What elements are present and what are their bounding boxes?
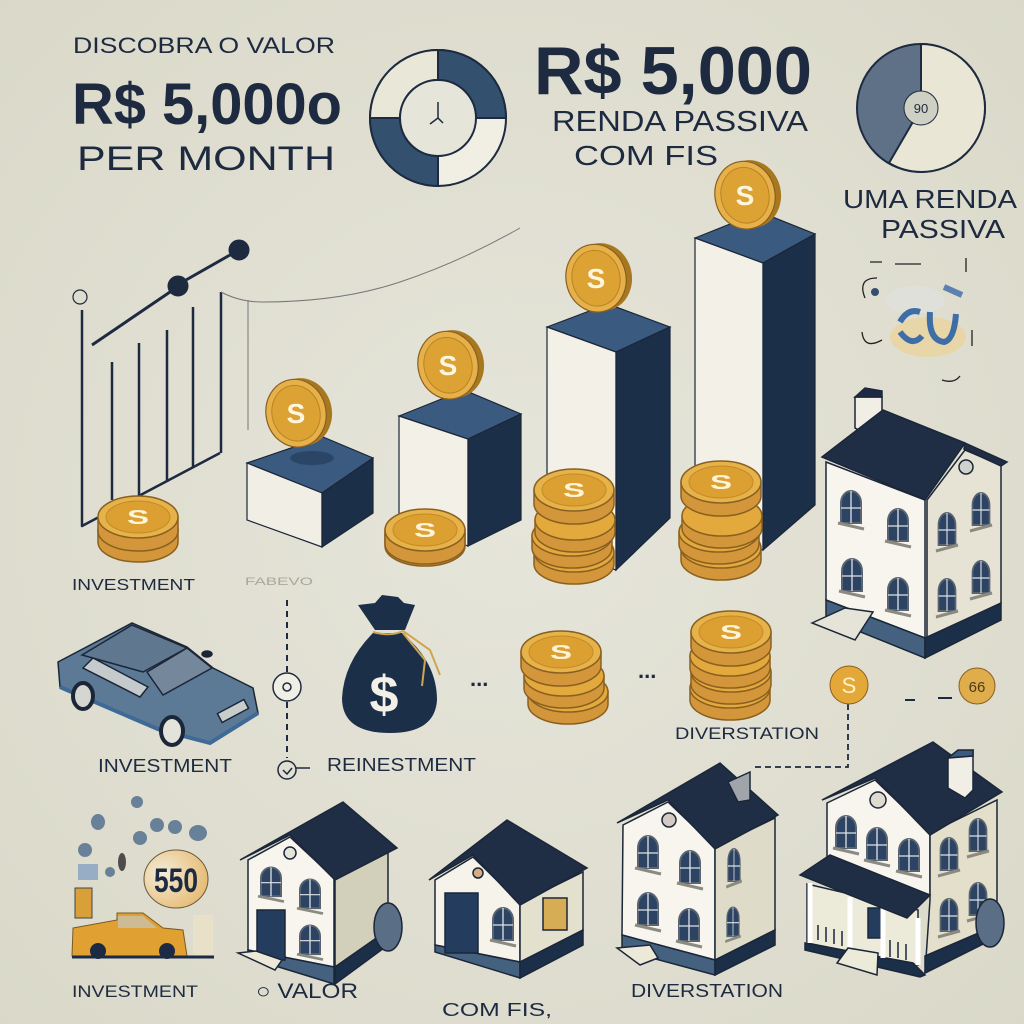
bar 4: [695, 212, 815, 550]
label: passive income: UMA RENDA: [843, 184, 1018, 214]
label: valor: ○ VALOR: [256, 980, 358, 1003]
label: passive income: PASSIVA: [881, 214, 1006, 244]
icon: yellow car with coins: 550: [154, 862, 198, 900]
house: large right: [812, 388, 1007, 658]
chart: pie: [857, 44, 985, 172]
label: reinvestment: REINESTMENT: [327, 755, 476, 775]
bar 2: [399, 390, 521, 546]
heading: discover the value: DISCOBRA O VALOR: [73, 33, 335, 58]
heading: passive income: COM FIS: [574, 140, 718, 171]
label: diversification bottom: DIVERSTATION: [631, 981, 783, 1001]
label: investment bottom: INVESTMENT: [72, 982, 198, 1001]
chart: line chart with bars: [73, 228, 520, 526]
label: investment middle: INVESTMENT: [98, 756, 232, 776]
icon: coin stack middle: [521, 631, 608, 724]
dots: ...: [470, 666, 488, 691]
heading: discover the value: [72, 33, 342, 178]
icon: small coins and connector: 66: [969, 679, 985, 696]
icon: money bag: $: [370, 666, 399, 724]
icon: small coins and connector: S: [842, 673, 856, 698]
icon: yellow car with coins: [72, 796, 214, 959]
chart: donut ring: [370, 50, 506, 186]
chart: pie: 90: [914, 101, 928, 116]
house: porch house: [800, 742, 1004, 977]
icon: small ring nodes: [273, 673, 310, 779]
icon: blurred money cluster: [862, 258, 972, 381]
heading: discover the value: R$ 5,000o: [72, 72, 342, 137]
label: investment: INVESTMENT: [72, 577, 195, 594]
icon: blue car: [58, 623, 258, 745]
heading: discover the value: PER MONTH: [77, 140, 335, 178]
icon: coin stacks on the floor: [98, 461, 762, 584]
label: diversification middle: DIVERSTATION: [675, 724, 819, 743]
dots: ...: [638, 658, 656, 683]
heading: passive income: R$ 5,000: [534, 33, 812, 109]
bar 1: [247, 437, 373, 547]
label: com fis: COM FIS,: [442, 1000, 552, 1020]
label: passive income: [843, 184, 1018, 244]
icon: coin stack right: [690, 611, 771, 720]
dashed connector: [286, 600, 288, 758]
bar 3: [547, 304, 670, 570]
label: faint: FABEVO: [245, 576, 314, 588]
icon: standing coins on bars: [260, 154, 787, 453]
house: tall center right: [617, 763, 778, 975]
heading: passive income: [534, 33, 812, 171]
icon: money bag: [342, 595, 440, 733]
icon: small coins and connector: [752, 666, 995, 767]
heading: passive income: RENDA PASSIVA: [552, 106, 809, 138]
house: small center: [429, 820, 587, 978]
house: small left: [238, 802, 402, 984]
